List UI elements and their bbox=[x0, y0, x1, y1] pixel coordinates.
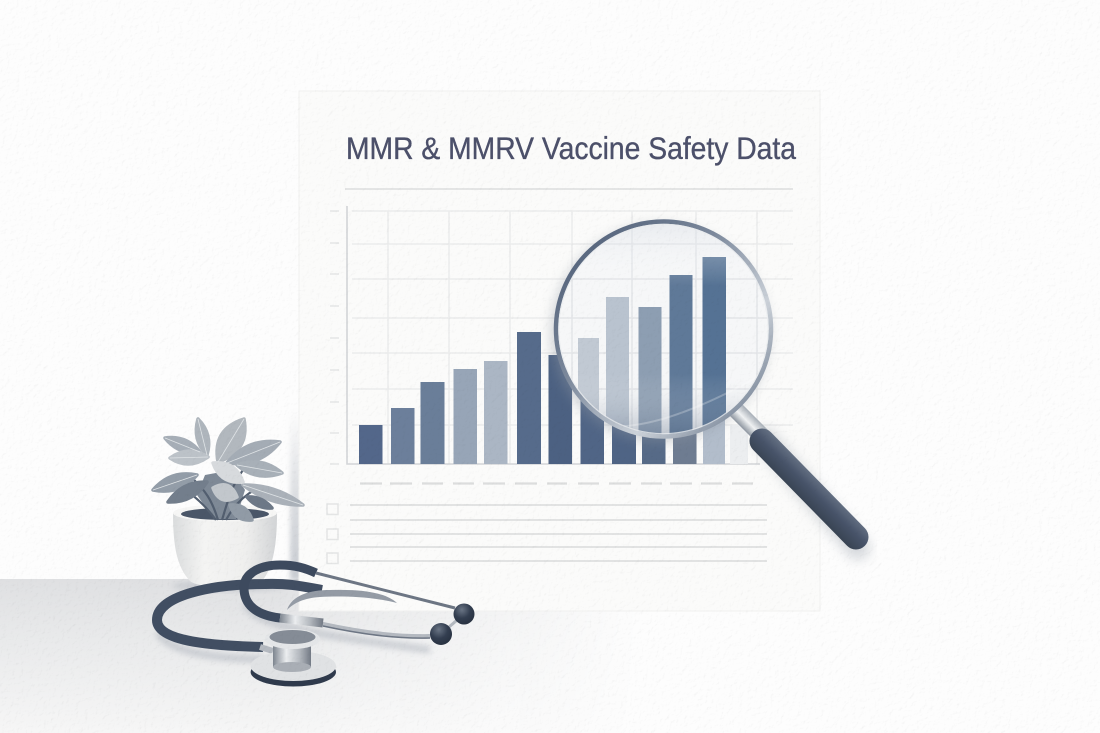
lens contents bbox=[558, 225, 768, 434]
heading: sheet title: MMR & MMRV Vaccine Safety Data bbox=[346, 130, 796, 166]
icon: stethoscope bbox=[157, 565, 474, 686]
handle grip bbox=[762, 441, 856, 537]
spring connector bbox=[441, 614, 464, 634]
potting soil bbox=[181, 508, 269, 520]
outer tube bbox=[157, 584, 322, 647]
chart grid bbox=[352, 211, 793, 464]
dashed legend row bbox=[360, 482, 753, 485]
ear tip upper bbox=[454, 604, 474, 624]
pot shadow bbox=[172, 581, 284, 591]
plant pot bbox=[173, 513, 277, 587]
lens rim bbox=[556, 222, 771, 436]
icon: potted plant bbox=[153, 419, 303, 591]
icon: magnifying glass bbox=[550, 215, 858, 548]
magnified bars bbox=[578, 338, 599, 411]
bar chart bbox=[359, 332, 748, 464]
handle shadow bbox=[765, 440, 858, 548]
lens shadow bbox=[551, 224, 769, 442]
checkbox placeholders bbox=[327, 504, 338, 564]
metal neck bbox=[736, 410, 763, 437]
text placeholder lines bbox=[350, 505, 767, 561]
tube sleeve bbox=[280, 618, 323, 623]
title rule bbox=[345, 188, 793, 190]
ear tip lower bbox=[430, 623, 452, 645]
stethoscope shadow bbox=[158, 604, 430, 659]
paper side shadow bbox=[290, 410, 301, 580]
ear tube upper bbox=[316, 573, 455, 608]
leaves bbox=[153, 419, 303, 520]
inner tube bbox=[244, 565, 316, 618]
ear tube lower bbox=[280, 618, 430, 636]
panel: data sheet bbox=[299, 91, 820, 611]
table surface bbox=[0, 579, 526, 726]
metal crescent bbox=[287, 590, 397, 610]
chart axes and ticks bbox=[330, 206, 760, 464]
chestpiece bbox=[251, 629, 336, 686]
